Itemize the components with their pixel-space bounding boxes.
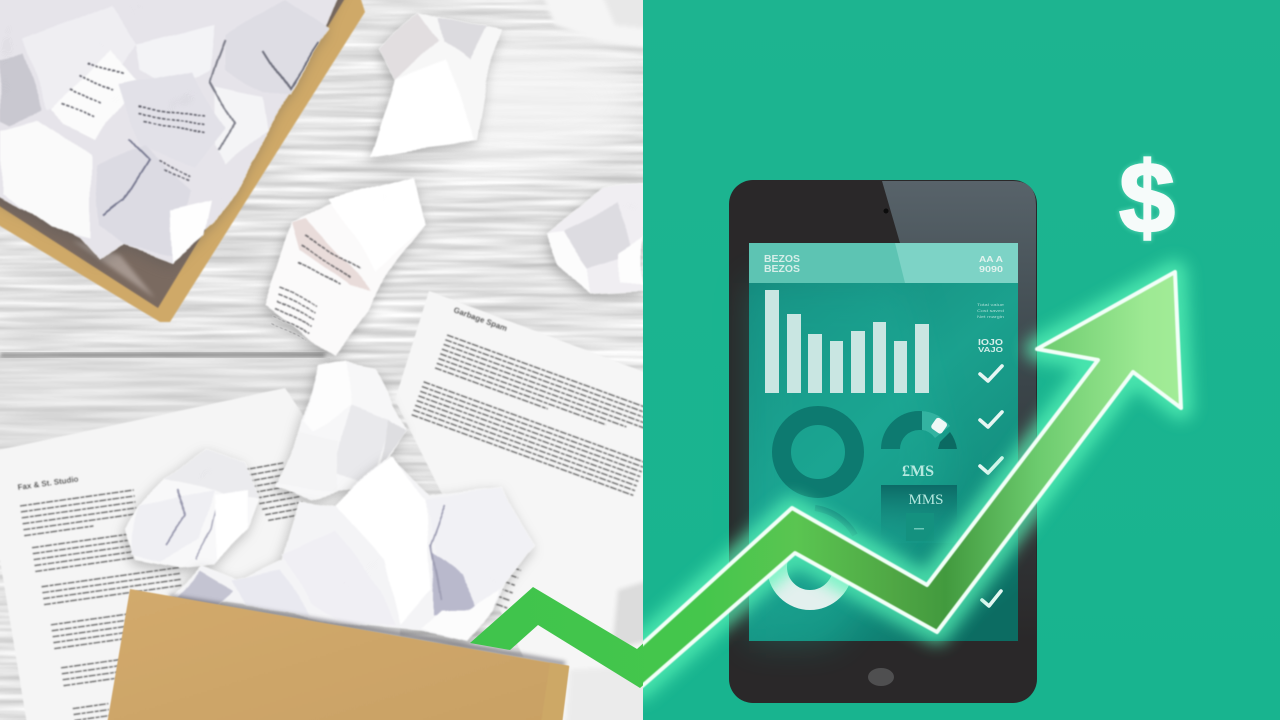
screen header: BEZOS — [764, 254, 800, 265]
dollar sign: $ — [1119, 142, 1175, 254]
dollar sign: $ — [1119, 142, 1175, 254]
wood desk background — [0, 0, 660, 720]
panel: paper clutter on wood desk — [0, 0, 663, 720]
camera — [884, 208, 888, 214]
torn document sheet — [265, 175, 425, 358]
crumpled paper pile, bottom centre — [170, 458, 535, 640]
document sheet, right — [397, 291, 643, 720]
small stat labels: Cost saved — [977, 308, 1004, 313]
arrow outer glow — [643, 254, 1200, 706]
stat label: £MS — [902, 463, 934, 480]
arrow body — [470, 272, 1181, 688]
screen header: 9090 — [979, 265, 1004, 274]
crumpled paper ball, centre top — [276, 362, 405, 498]
home button — [868, 668, 894, 686]
tablet body — [729, 180, 1037, 703]
screen header: AA A — [979, 255, 1003, 264]
partial ring chart — [777, 508, 855, 600]
box of crumpled paper, top left — [0, 0, 365, 322]
growth arrow — [470, 272, 1181, 688]
donut chart — [782, 416, 854, 488]
small stat labels — [977, 302, 1005, 354]
bar chart — [765, 290, 929, 393]
tablet glare — [882, 181, 1036, 640]
crumpled paper ball, top centre — [370, 12, 503, 155]
data card — [881, 485, 957, 543]
screen header — [749, 243, 1018, 283]
small stat labels: Total value — [977, 302, 1005, 307]
crumpled paper ball, right — [548, 185, 644, 293]
arrow highlight outline — [643, 269, 1184, 689]
small stat labels: VAJO — [978, 347, 1004, 354]
document heading: Garbage Spam — [452, 305, 508, 333]
check marks — [980, 366, 1002, 606]
crumpled paper, top right — [544, 0, 643, 49]
document heading: Fax & St. Studio — [17, 475, 79, 492]
small stat labels: IOJO — [978, 338, 1003, 347]
gauge chart — [881, 411, 957, 449]
panel: green growth background — [643, 0, 1280, 720]
crumpled paper ball, left — [128, 448, 262, 568]
data card: MMS — [908, 492, 944, 508]
cardboard box, bottom — [106, 589, 569, 720]
tablet screen — [749, 243, 1018, 641]
document sheet, bottom left — [0, 388, 400, 720]
crumpled paper pile in box — [0, 0, 345, 262]
tablet device — [729, 180, 1037, 703]
screen header: BEZOS — [764, 264, 800, 275]
small stat labels: Net margin — [977, 314, 1004, 319]
